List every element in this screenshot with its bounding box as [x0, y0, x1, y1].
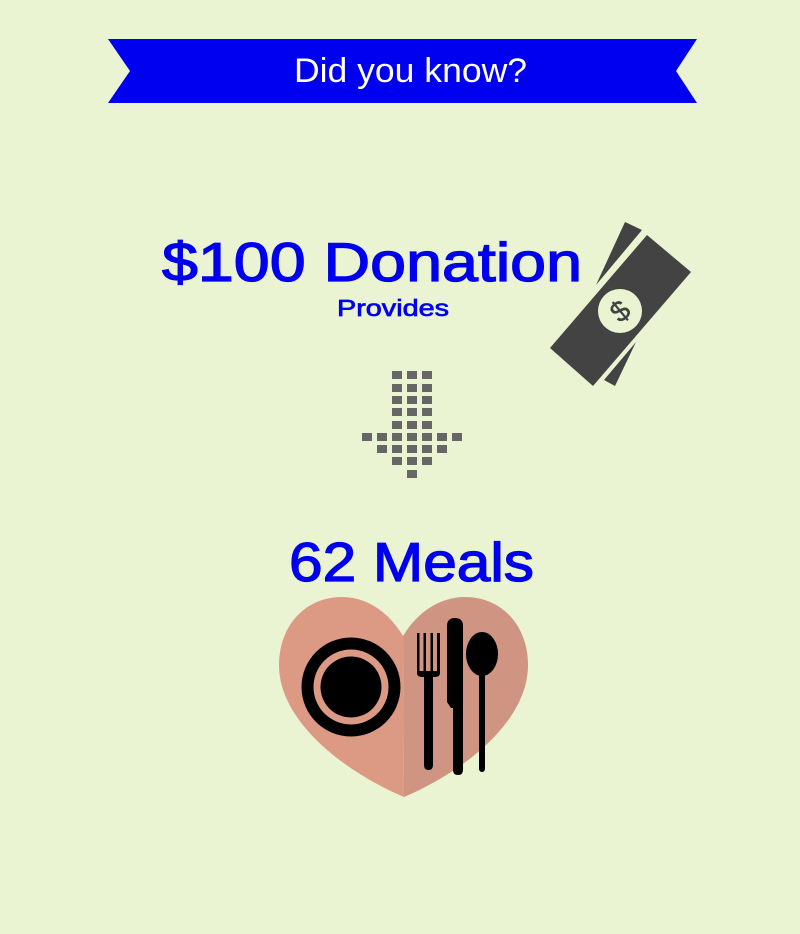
icon: heart with plate and cutlery [279, 597, 528, 797]
heart left half [279, 597, 404, 797]
heart right half [403, 597, 528, 797]
fork [417, 633, 440, 770]
dollar sign: $ [604, 294, 637, 329]
knife [447, 618, 463, 775]
banner title: Did you know? [294, 52, 527, 90]
arrow: dotted down arrow [362, 371, 462, 478]
spoon [466, 632, 498, 772]
banner: Did you know? [108, 39, 697, 103]
heading: 62 Meals: 62 Meals [289, 531, 534, 593]
heading: $100 Donation: $100 Donation [162, 231, 582, 293]
subheading: Provides: Provides [337, 295, 449, 321]
icon: money bills [550, 222, 691, 386]
plate [302, 638, 400, 736]
